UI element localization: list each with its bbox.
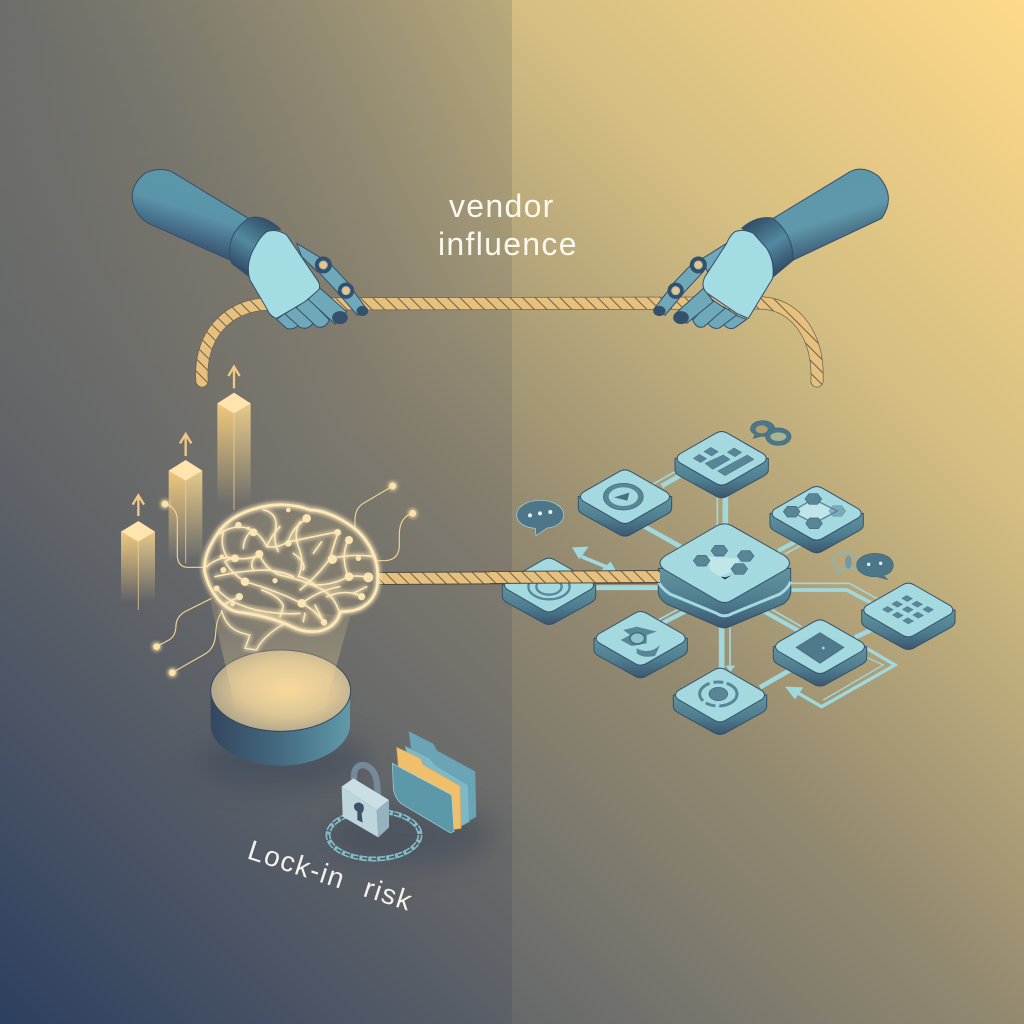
left lower fingers <box>277 287 347 329</box>
lock-in cluster <box>328 732 476 859</box>
tile: left, under rope <box>502 558 596 624</box>
soft shadow under pedestal and lock cluster <box>200 730 495 865</box>
left robotic arm <box>132 170 368 329</box>
tile: network <box>770 486 863 553</box>
brain glow <box>203 507 377 627</box>
right upper finger <box>654 243 727 316</box>
heading: vendor influence <box>438 188 578 262</box>
folders <box>392 732 476 833</box>
padlock <box>342 765 389 837</box>
projection beam <box>210 600 350 713</box>
glowing pedestal <box>210 600 351 766</box>
heading: vendor influence: influence <box>438 226 578 262</box>
chain ring <box>328 811 420 859</box>
right cuff <box>742 218 793 277</box>
tile: grid <box>862 583 955 649</box>
heading: vendor influence: vendor <box>449 188 555 224</box>
tile: top chart <box>675 431 768 498</box>
rope across left tile <box>490 576 660 578</box>
background: left half <box>0 0 512 1024</box>
label: lock-in risk: risk <box>360 872 417 917</box>
brain to platform rope <box>378 577 660 578</box>
platform network <box>502 421 955 734</box>
left palm <box>248 231 320 318</box>
left upper finger <box>297 243 368 316</box>
top rope <box>202 303 817 381</box>
brain nodes <box>214 508 373 626</box>
background: top-left shade <box>0 0 512 560</box>
tile: bottom ring <box>673 668 767 734</box>
tile: swirl lower left <box>594 611 687 678</box>
tile: square <box>773 620 867 686</box>
chat bubble left <box>517 500 564 536</box>
glowing brain <box>203 505 378 650</box>
pedestal side <box>211 690 350 766</box>
left forearm <box>132 170 248 260</box>
tile: play <box>578 470 672 536</box>
bar 2 <box>169 434 202 563</box>
bar 1 <box>121 495 155 610</box>
bar 3 <box>217 367 251 510</box>
background: right half <box>512 0 1024 1024</box>
right forearm <box>773 169 888 260</box>
label: lock-in risk <box>244 834 417 917</box>
left cuff <box>230 217 281 277</box>
circuit wires with end nodes <box>153 483 416 676</box>
rising glowing bars <box>121 367 251 610</box>
central hub <box>658 524 791 628</box>
right palm <box>703 230 773 318</box>
connector arrow heads <box>713 489 803 699</box>
label: lock-in risk: Lock-in <box>244 834 350 895</box>
chat bubbles right <box>833 552 893 579</box>
brain outline and folds <box>204 505 378 650</box>
double headed arrow <box>572 547 617 572</box>
pedestal top <box>211 650 351 731</box>
chat bubbles top <box>751 421 791 445</box>
right lower fingers <box>674 288 747 329</box>
right robotic arm <box>654 169 888 329</box>
connector lines <box>596 472 895 707</box>
